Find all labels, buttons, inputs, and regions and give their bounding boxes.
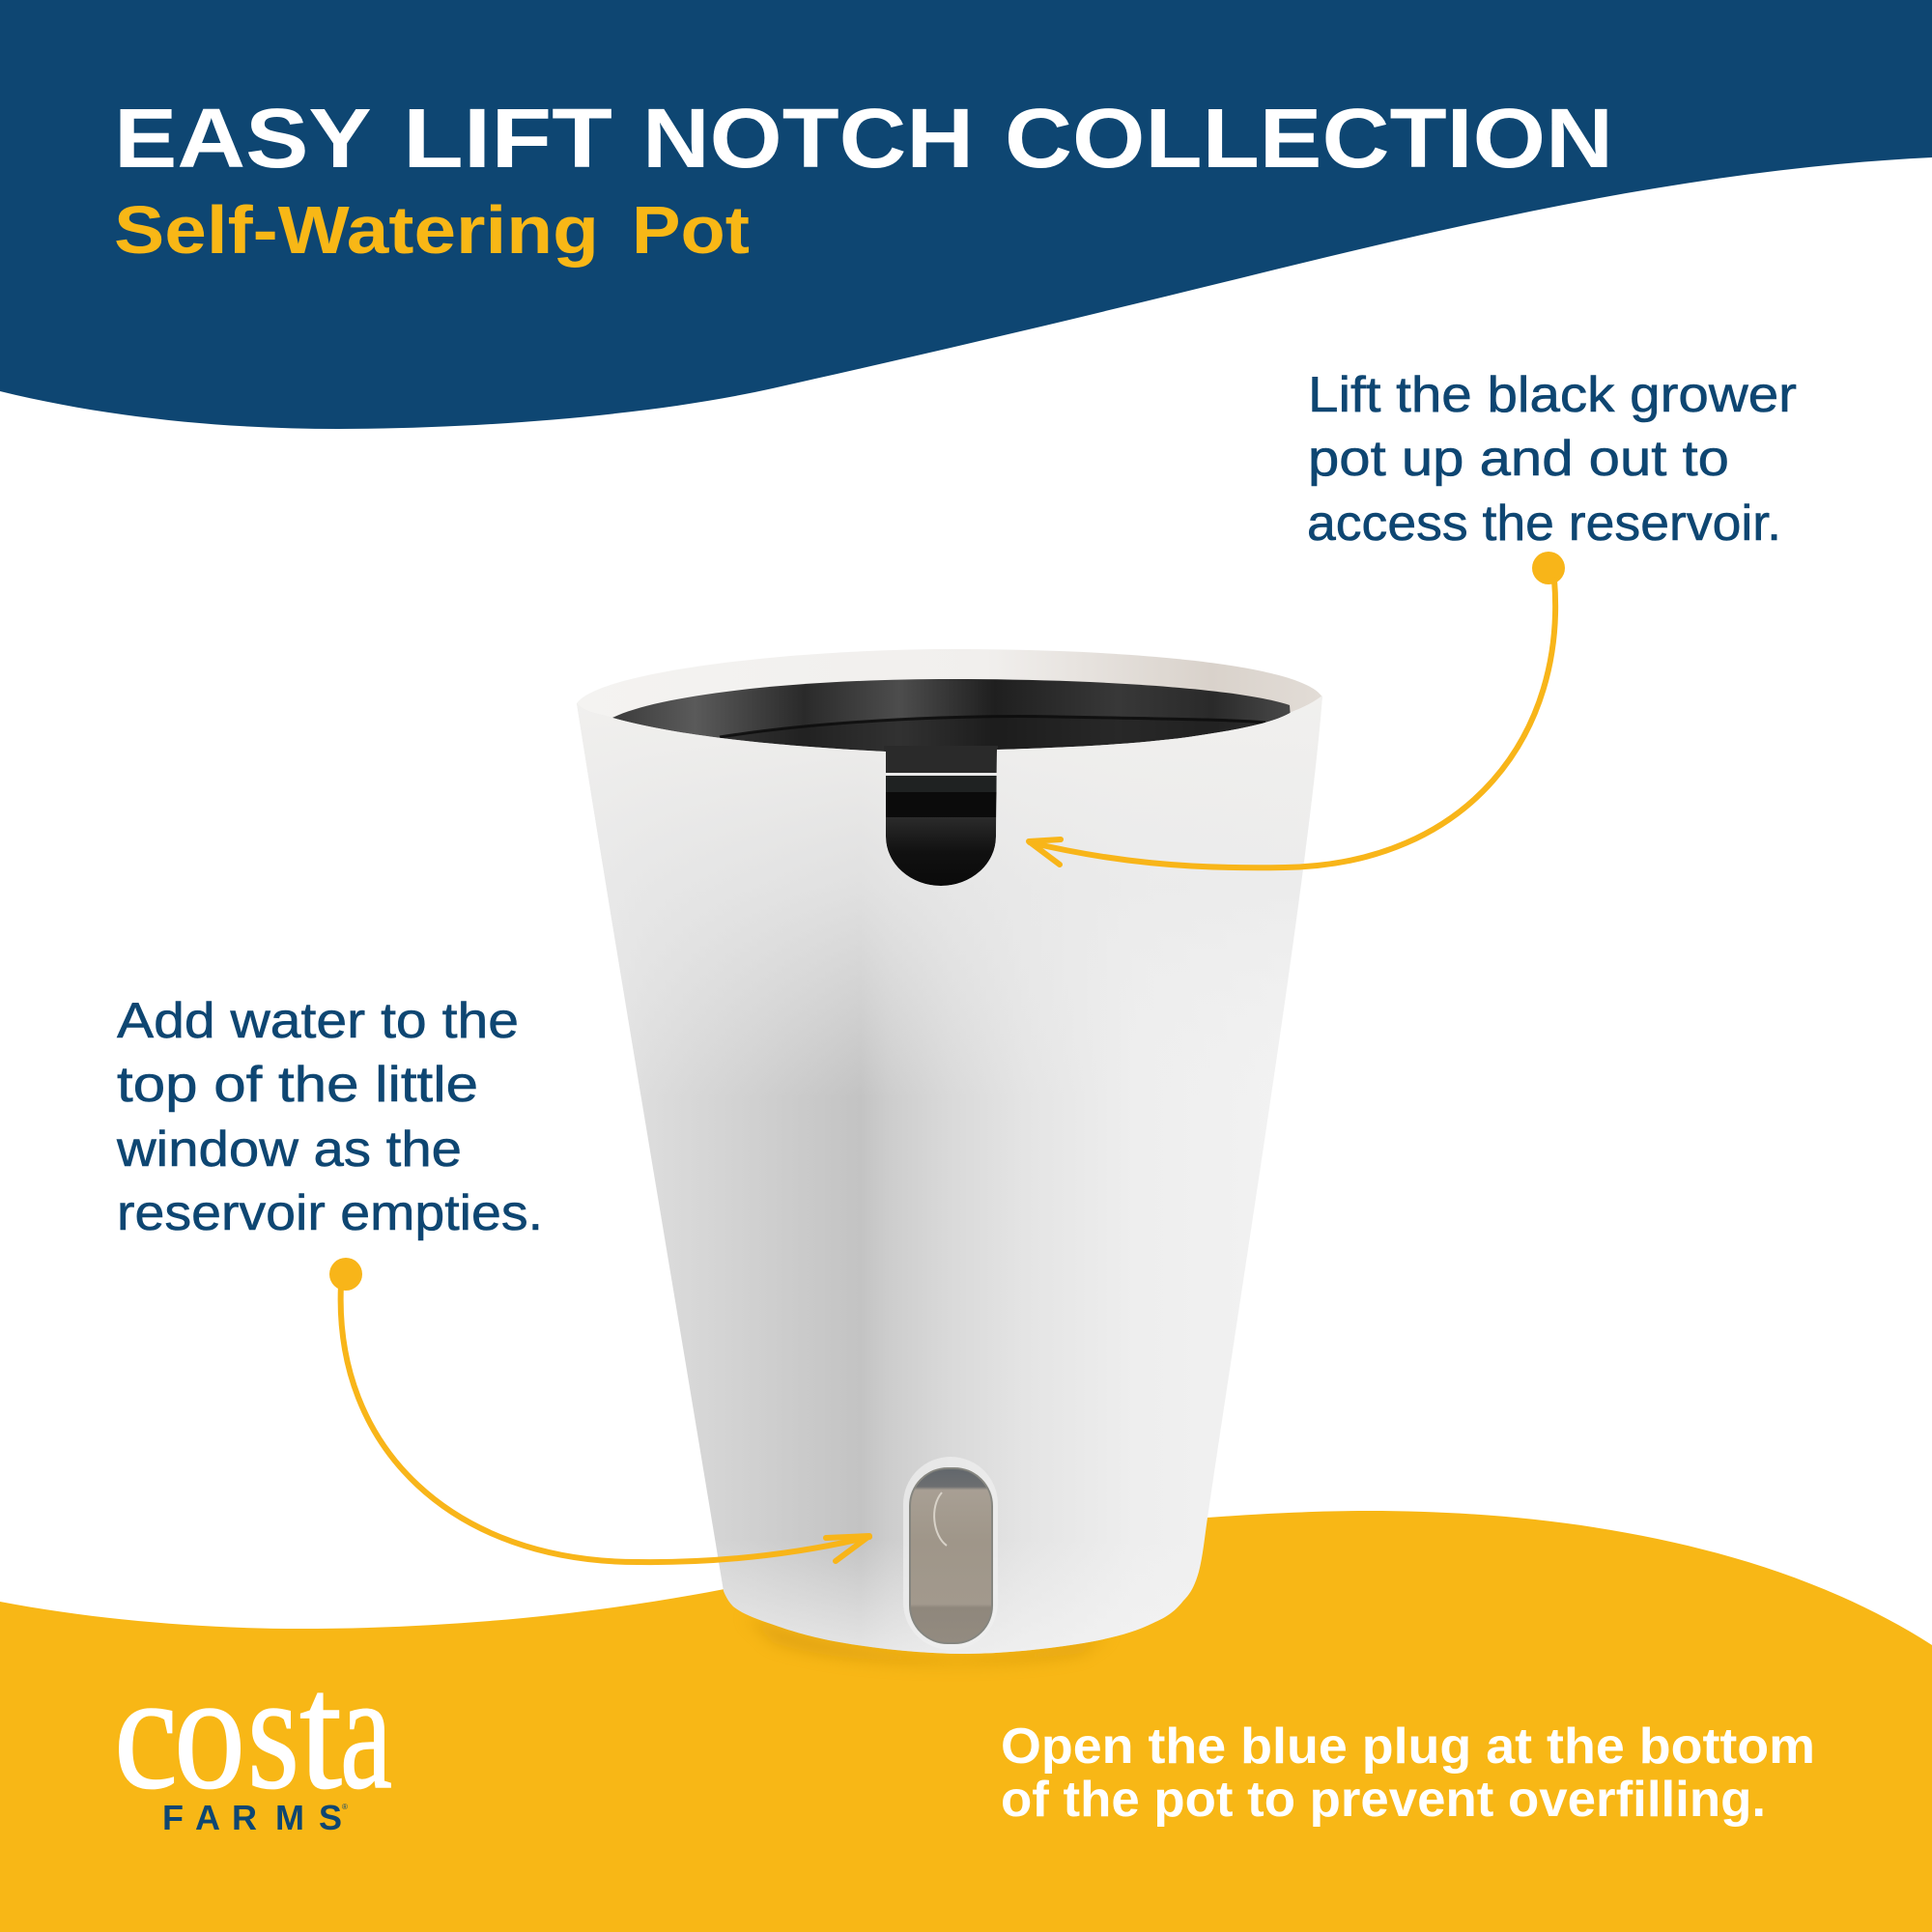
callout: blue plug: Open the blue plug at the bottom <box>1001 1719 1815 1775</box>
logo wordmark: o <box>174 1640 245 1824</box>
callout text: top of the little <box>117 1057 478 1113</box>
logo subline: FARMS <box>162 1798 342 1837</box>
title: EASY <box>114 92 371 185</box>
callout dot <box>1532 552 1565 584</box>
title: LIFT <box>403 92 612 185</box>
window reflection mark <box>934 1492 947 1546</box>
water level window <box>910 1468 992 1643</box>
logo wordmark: t <box>299 1640 342 1824</box>
white pot body with notch <box>577 696 1322 1654</box>
grower pot lower shelf <box>720 717 1265 773</box>
grower pot inner lip line <box>720 717 1265 737</box>
arrow to notch <box>1029 580 1555 867</box>
logo wordmark: c <box>114 1640 178 1824</box>
callout: add water <box>116 993 869 1562</box>
title: COLLECTION <box>1005 92 1613 185</box>
callout text: access the reservoir. <box>1307 496 1781 552</box>
logo: Costa Farms <box>114 1640 392 1837</box>
callout: blue plug: of the pot to prevent overfilling. <box>1001 1772 1766 1828</box>
callout text: pot up and out to <box>1308 431 1729 487</box>
callout: lift the grower pot <box>1029 367 1810 867</box>
logo wordmark: a <box>340 1640 392 1824</box>
self-watering pot photo <box>577 649 1322 1664</box>
subtitle: Self-Watering <box>114 192 599 268</box>
water level window surround <box>903 1457 998 1650</box>
registered mark: ® <box>342 1803 348 1811</box>
title: NOTCH <box>642 92 974 185</box>
subtitle: Pot <box>632 192 750 268</box>
callout text: Lift the black grower <box>1308 367 1797 423</box>
bottom yellow wave band <box>0 1511 1932 1932</box>
callout dot <box>329 1258 362 1291</box>
grower pot tab in notch <box>884 746 998 889</box>
callout text: reservoir empties. <box>117 1185 543 1241</box>
top navy wave banner <box>0 0 1932 429</box>
ground shadow under pot <box>744 1615 1111 1664</box>
pot body lighting overlay <box>577 696 1322 1654</box>
black grower pot interior <box>612 679 1294 773</box>
logo wordmark: s <box>247 1640 299 1824</box>
callout text: window as the <box>116 1122 462 1178</box>
callout text: Add water to the <box>117 993 519 1049</box>
arrow to window <box>341 1285 869 1562</box>
pot rim inner band <box>577 649 1322 763</box>
